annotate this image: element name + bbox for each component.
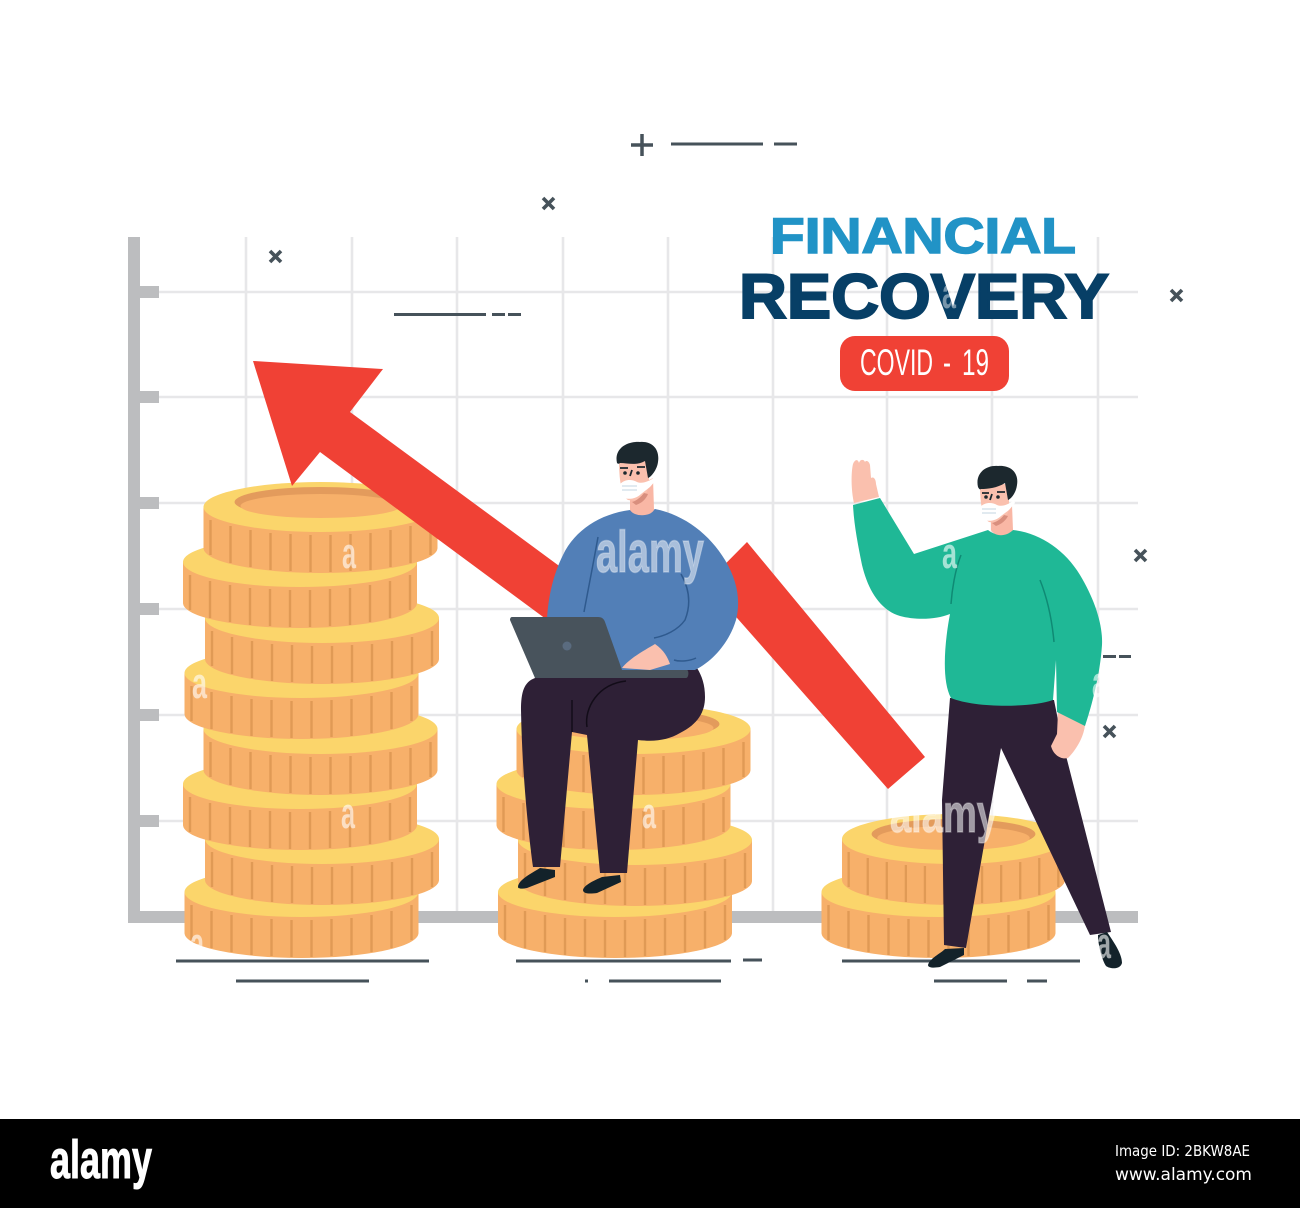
watermarks: alamy [890,784,998,844]
watermarks: a [342,529,356,578]
watermarks [190,269,1111,968]
raised hand [852,460,879,503]
covid badge: - [943,342,951,383]
covid badge [840,336,1009,391]
shoes [928,932,1122,968]
person: seated man with laptop [510,442,738,894]
covid badge: 19 [962,342,989,383]
laptop [510,617,688,678]
heading line 1: FINANCIAL [770,208,1076,264]
watermarks: a [942,529,957,578]
covid badge: COVID [860,342,933,383]
watermarks: alamy [596,520,704,585]
trousers [942,698,1111,948]
image id: Image ID: 2BKW8AE [1115,1142,1250,1160]
trousers [521,668,705,873]
chart grid and axes [128,237,1138,923]
watermarks: a [942,269,956,318]
watermarks: a [642,789,656,838]
heading line 2: RECOVERY [739,262,1109,332]
head [617,442,658,515]
shoes [518,868,621,894]
title: Financial Recovery [739,208,1109,332]
coin stack: middle [496,704,752,958]
watermarks: a [1097,919,1111,968]
head [977,466,1017,535]
watermarks: a [192,659,207,708]
red trend arrow [253,361,925,789]
watermarks: a [190,919,204,968]
left hand on hip [1051,712,1085,758]
sweater [853,498,1102,726]
hand [622,644,670,670]
person: standing man waving [852,460,1122,968]
decorative marks [176,134,1182,981]
coin stack: left [183,482,439,958]
website: www.alamy.com [1115,1165,1252,1185]
footer logo: alamy [50,1130,152,1190]
coin stack: right [822,814,1065,958]
watermarks: a [341,789,355,838]
footer bar [0,1119,1300,1208]
watermarks: a [1092,658,1106,707]
sweater [547,509,738,670]
